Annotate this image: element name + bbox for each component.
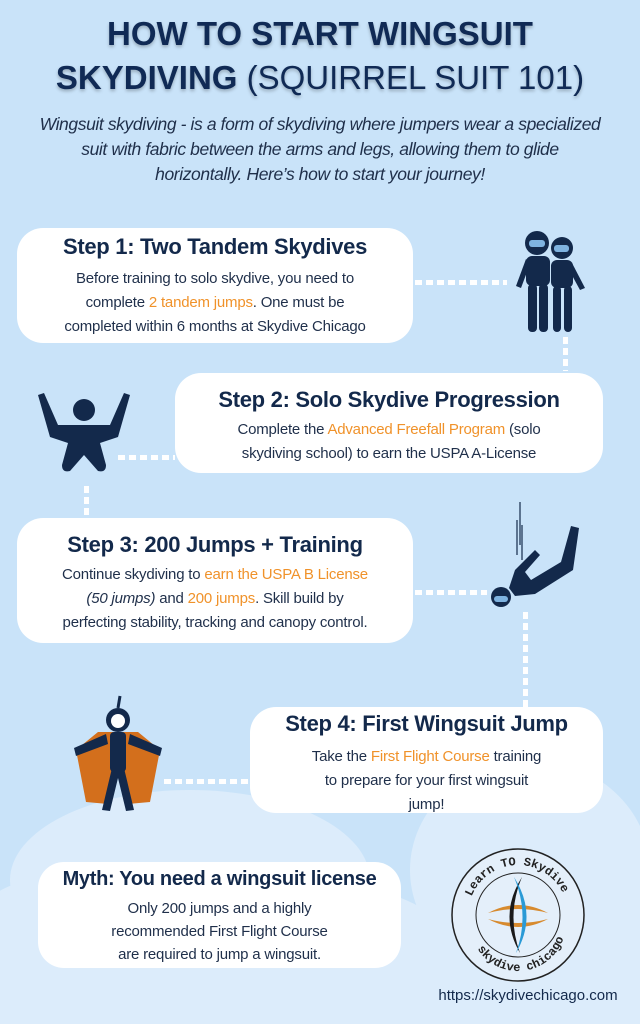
step 3 heading: Step 3: 200 Jumps + Training	[67, 532, 363, 557]
myth heading: Myth: You need a wingsuit license	[63, 868, 376, 890]
icon: tandem skydivers	[516, 231, 585, 332]
step 2 heading: Step 2: Solo Skydive Progression	[218, 387, 560, 412]
intro text: horizontally. Here’s how to start your journey!	[155, 164, 485, 184]
step 1 text: Before training to solo skydive, you need to	[76, 270, 354, 287]
step 3 text	[62, 566, 368, 631]
icon: head-down skydiver	[491, 502, 579, 607]
panel: step 1	[17, 228, 413, 343]
url: https://skydivechicago.com	[438, 987, 618, 1004]
myth text: recommended First Flight Course	[111, 923, 328, 940]
title: HOW TO START WINGSUIT	[107, 15, 533, 52]
step 2 text: skydiving school) to earn the USPA A-License	[242, 445, 536, 462]
step 1 text	[64, 270, 366, 335]
step 2 text	[237, 421, 541, 462]
step 3 text: perfecting stability, tracking and canopy control.	[63, 614, 367, 631]
step 3 text: Continue skydiving to earn the USPA B License	[62, 566, 368, 583]
panel: step 2	[175, 373, 603, 473]
step 4 text: Take the First Flight Course training	[312, 748, 541, 765]
title	[56, 15, 584, 99]
step 1 heading: Step 1: Two Tandem Skydives	[63, 234, 367, 259]
myth text	[111, 900, 328, 963]
step 1 text: complete 2 tandem jumps. One must be	[86, 294, 344, 311]
step 1 text: completed within 6 months at Skydive Chicago	[64, 318, 366, 335]
panel: step 3	[17, 518, 413, 643]
panel: myth	[38, 862, 401, 968]
icon: solo skydiver	[38, 393, 130, 472]
title: SKYDIVING (SQUIRREL SUIT 101)	[56, 59, 584, 96]
step 4 text	[312, 748, 541, 813]
logo: learn to skydive: Learn TO Skydive	[464, 857, 568, 896]
step 4 heading: Step 4: First Wingsuit Jump	[285, 711, 568, 736]
logo: learn to skydive: skydive chicago	[478, 937, 563, 972]
step 2 text: Complete the Advanced Freefall Program (solo	[237, 421, 541, 438]
myth text: are required to jump a wingsuit.	[118, 946, 321, 963]
panel: step 4	[250, 707, 603, 813]
intro text: Wingsuit skydiving - is a form of skydiving where jumpers wear a specialized	[40, 114, 600, 134]
step 3 text: (50 jumps) and 200 jumps. Skill build by	[86, 590, 344, 607]
intro text	[40, 114, 602, 184]
step 4 text: jump!	[409, 796, 444, 813]
myth text: Only 200 jumps and a highly	[128, 900, 311, 917]
icon: wingsuit flyer	[74, 696, 162, 811]
intro text: suit with fabric between the arms and legs, allowing them to glide	[81, 139, 559, 159]
step 4 text: to prepare for your first wingsuit	[325, 772, 528, 789]
logo: learn to skydive	[451, 848, 585, 982]
